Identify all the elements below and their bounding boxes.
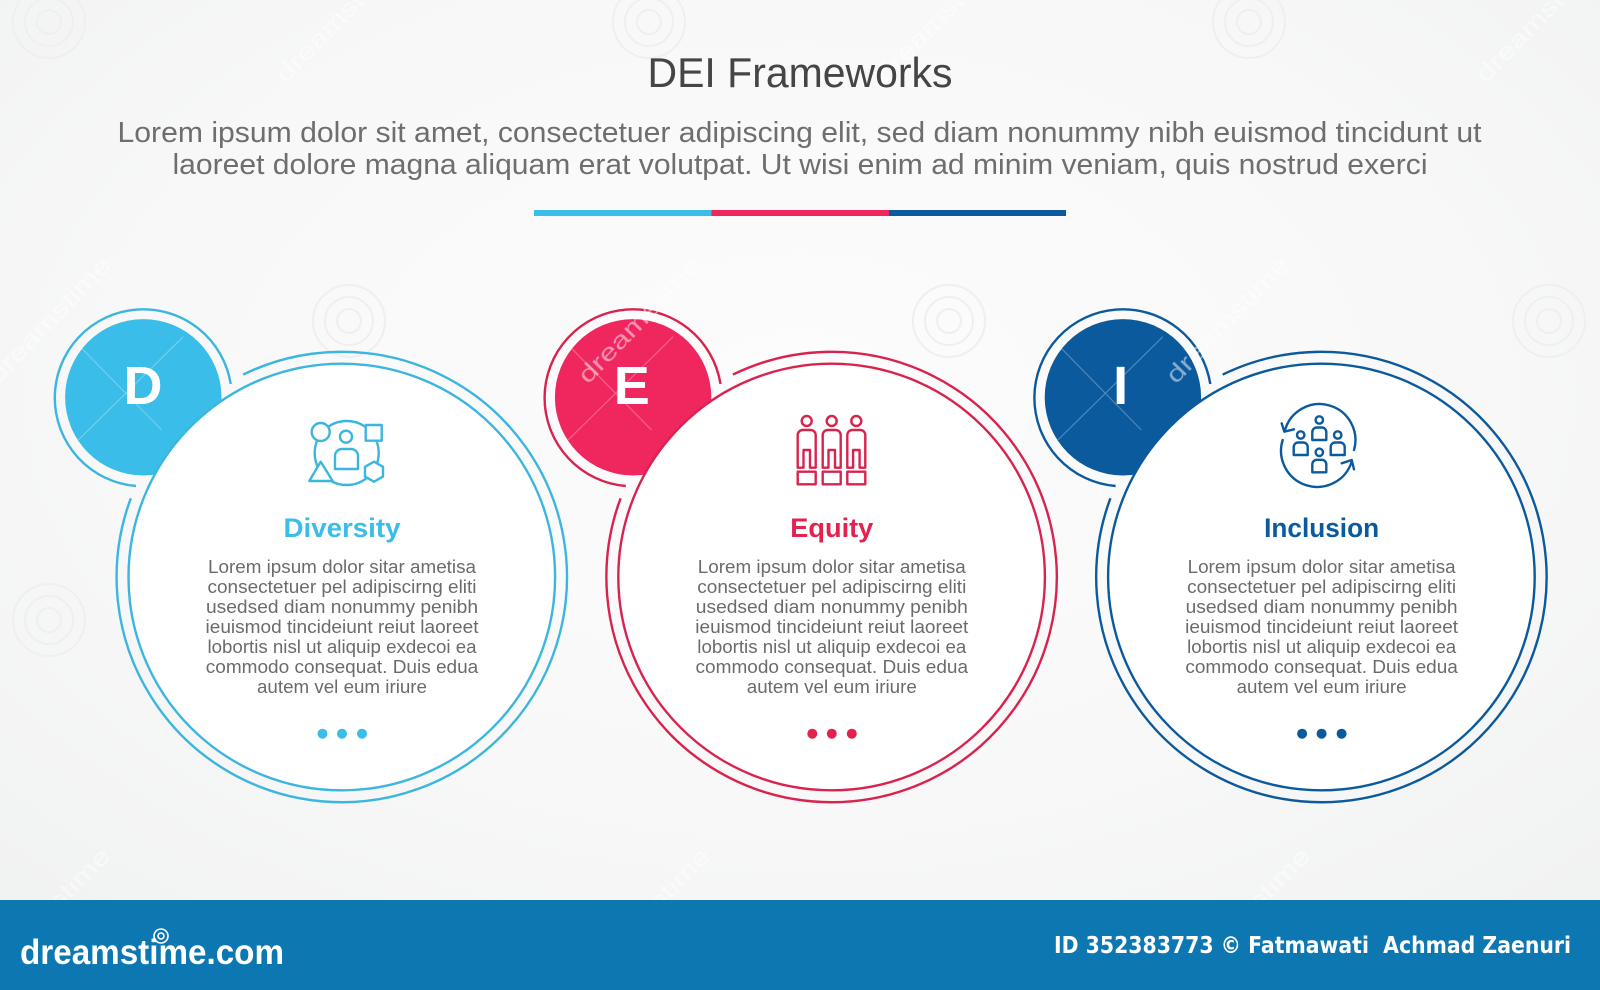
body text: inclusion: Lorem ipsum dolor sitar ametisa bbox=[1188, 557, 1457, 577]
body text: diversity: commodo consequat. Duis edua bbox=[206, 657, 479, 677]
body text: diversity: lobortis nisl ut aliquip exdecoi ea bbox=[208, 637, 478, 657]
body text: inclusion bbox=[1185, 557, 1459, 697]
body text: inclusion: autem vel eum iriure bbox=[1237, 677, 1407, 697]
badge ring: I bbox=[1034, 309, 1210, 486]
badge ring: E bbox=[545, 309, 720, 486]
body text: diversity: Lorem ipsum dolor sitar ametisa bbox=[208, 557, 477, 577]
body text: diversity: autem vel eum iriure bbox=[257, 677, 427, 697]
letter I: I bbox=[1113, 356, 1128, 416]
body text: diversity: usedsed diam nonummy penibh bbox=[206, 597, 478, 617]
body text: diversity bbox=[206, 557, 479, 697]
badge circle: E bbox=[555, 319, 711, 475]
panel: diversity bbox=[55, 309, 567, 802]
inner circle: inclusion bbox=[1108, 364, 1535, 790]
heading: Diversity: Diversity bbox=[284, 513, 400, 543]
icon: people in a circular cycle bbox=[1281, 404, 1355, 487]
watermark text: middle and bottom rows: dreamstime bbox=[1161, 252, 1295, 389]
body text: equity: usedsed diam nonummy penibh bbox=[696, 597, 968, 617]
body text: equity: autem vel eum iriure bbox=[747, 677, 917, 697]
subtitle text block bbox=[118, 117, 1482, 181]
subtitle text block: Lorem ipsum dolor sit amet, consectetuer adipiscing elit, sed diam nonummy nibh euismod tincidunt ut bbox=[118, 117, 1482, 149]
body text: equity bbox=[695, 557, 969, 697]
heading: Inclusion: Inclusion bbox=[1264, 513, 1379, 543]
subtitle text block: laoreet dolore magna aliquam erat volutpat. Ut wisi enim ad minim veniam, quis nostrud exerci bbox=[172, 149, 1428, 181]
inner circle: equity bbox=[618, 364, 1045, 790]
watermark text: middle and bottom rows bbox=[0, 252, 1316, 980]
panel: equity bbox=[545, 309, 1057, 802]
body text: inclusion: usedsed diam nonummy penibh bbox=[1186, 597, 1458, 617]
body text: diversity: ieuismod tincideiunt reiut laoreet bbox=[206, 617, 478, 637]
badge ring: D bbox=[55, 309, 231, 486]
footer logo: dreamstime.com: dreamstime.com bbox=[20, 933, 284, 972]
outer ring: equity bbox=[606, 352, 1057, 802]
title: DEI Frameworks bbox=[648, 49, 952, 96]
watermark text: middle and bottom rows: dreamstime bbox=[573, 252, 707, 389]
body text: inclusion: consectetuer pel adipiscirng eliti bbox=[1187, 577, 1456, 597]
tri-colour divider bar bbox=[534, 210, 1066, 216]
heading: Equity: Equity bbox=[790, 513, 873, 543]
body text: equity: commodo consequat. Duis edua bbox=[696, 657, 969, 677]
body text: diversity: consectetuer pel adipiscirng eliti bbox=[208, 577, 476, 597]
icon: three people on equal blocks bbox=[798, 416, 865, 484]
body text: equity: ieuismod tincideiunt reiut laoreet bbox=[695, 617, 968, 637]
panel: inclusion bbox=[1034, 309, 1547, 802]
body text: equity: lobortis nisl ut aliquip exdecoi ea bbox=[697, 637, 967, 657]
badge circle: I bbox=[1045, 319, 1201, 475]
dots: equity bbox=[807, 729, 857, 739]
watermark text: middle and bottom rows: dreamstime bbox=[582, 843, 716, 980]
body text: equity: Lorem ipsum dolor sitar ametisa bbox=[698, 557, 967, 577]
dots: diversity bbox=[318, 729, 367, 739]
inner circle: diversity bbox=[128, 364, 555, 790]
body text: inclusion: lobortis nisl ut aliquip exdecoi ea bbox=[1187, 637, 1457, 657]
outer ring: diversity bbox=[117, 352, 567, 802]
body text: inclusion: ieuismod tincideiunt reiut laoreet bbox=[1185, 617, 1458, 637]
letter D: D bbox=[124, 356, 162, 416]
watermark text: middle and bottom rows: dreamstime bbox=[1182, 843, 1316, 980]
footer band bbox=[0, 900, 1600, 990]
dots: inclusion bbox=[1297, 729, 1347, 739]
outer ring: inclusion bbox=[1096, 352, 1547, 802]
watermark text: top row bbox=[271, 0, 1600, 88]
badge circle: D bbox=[65, 319, 222, 475]
body text: inclusion: commodo consequat. Duis edua bbox=[1185, 657, 1459, 677]
body text: equity: consectetuer pel adipiscirng eliti bbox=[697, 577, 966, 597]
letter E: E bbox=[614, 356, 650, 416]
icon: diverse people and shapes bbox=[309, 421, 383, 485]
